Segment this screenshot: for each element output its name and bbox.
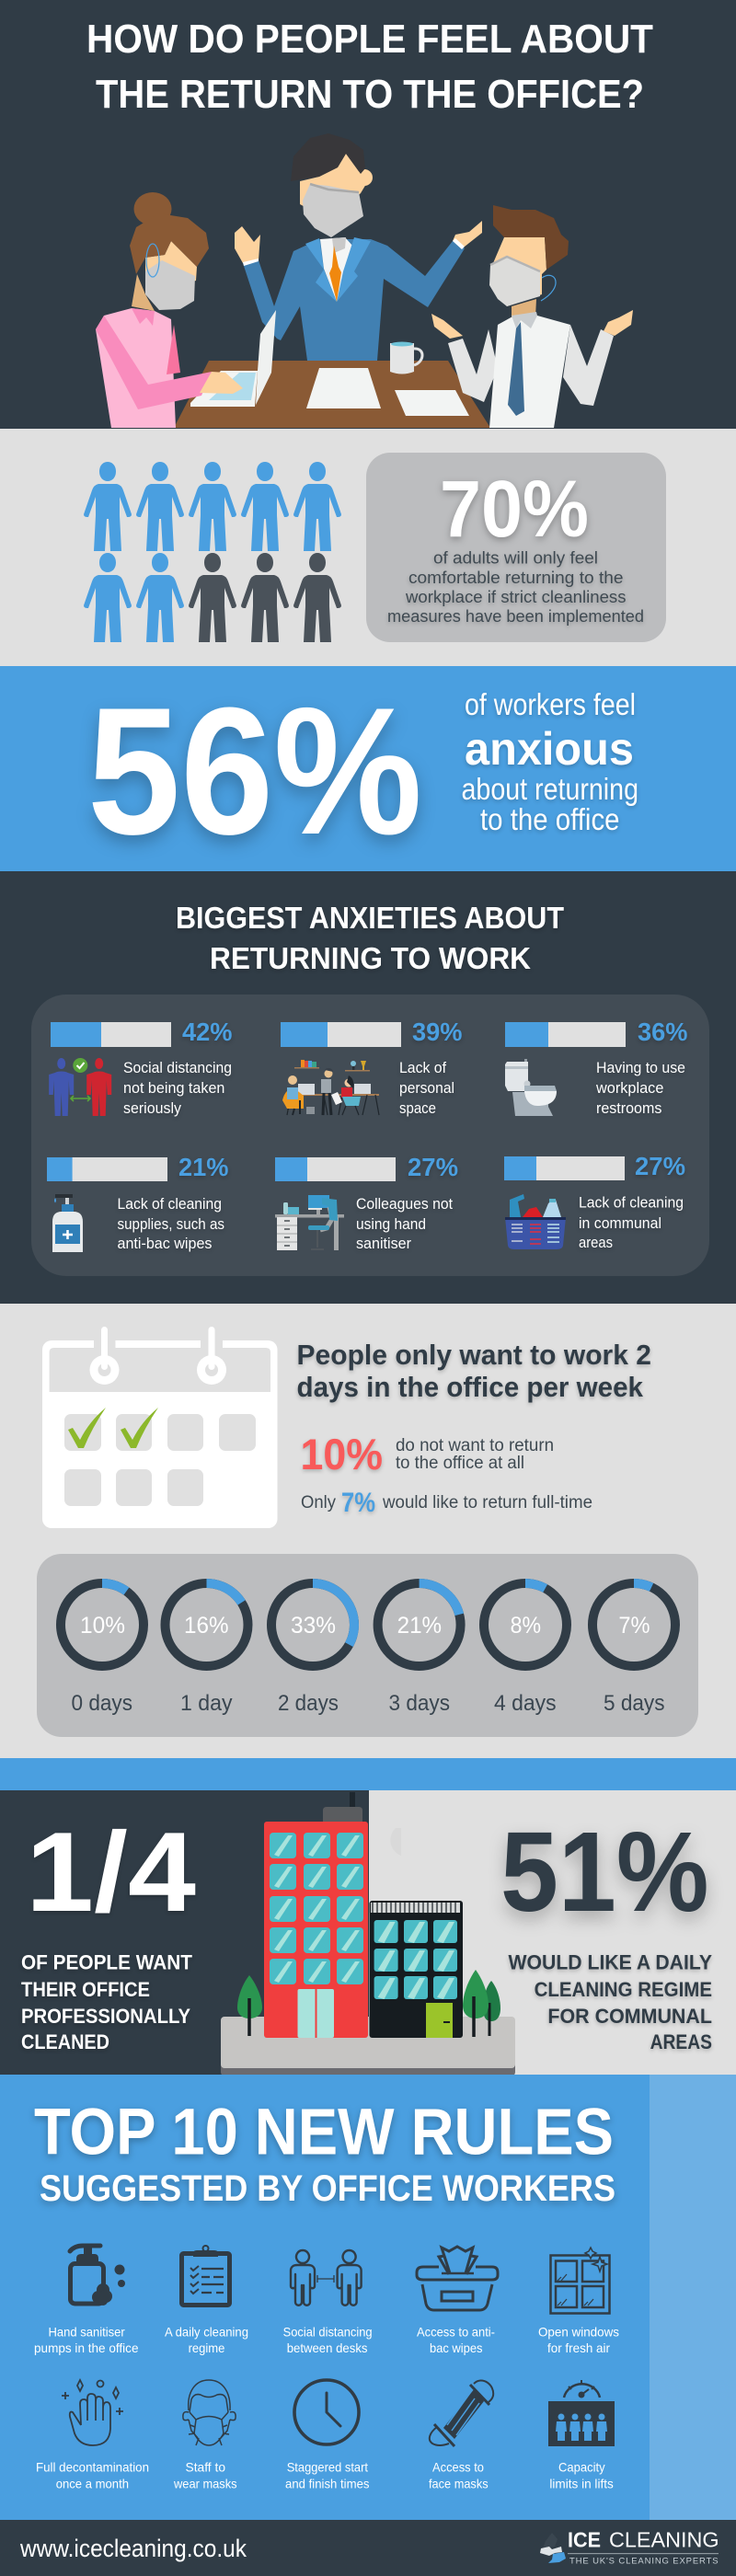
- icon: sanitiser bottle: [52, 1194, 83, 1252]
- stat: 10 percent: [300, 1430, 554, 1478]
- rule: anti-bac wipes: Access to anti-: [417, 2324, 495, 2339]
- logo: THE UK'S CLEANING EXPERTS: [569, 2557, 719, 2567]
- rule: social distancing: between desks: [287, 2340, 368, 2355]
- trees: [237, 1970, 500, 2037]
- stat description: of workers feel: [465, 687, 636, 721]
- rule: wear masks: [173, 2380, 237, 2490]
- icon: desk with chair: [275, 1195, 344, 1250]
- red building: [264, 1792, 368, 2038]
- text: daily cleaning regime: AREAS: [650, 2030, 712, 2053]
- stat: 7 percent: [301, 1488, 592, 1518]
- laptop: [190, 310, 276, 407]
- icon: toilet: [505, 1059, 557, 1116]
- logo: CLEANING: [609, 2528, 719, 2552]
- illustration: three masked office workers at a table: [96, 133, 633, 428]
- stat: 7 percent: 7%: [341, 1488, 375, 1518]
- rule: wear masks: Staff to: [186, 2460, 225, 2475]
- item: hand sanitiser use 27%: sanitiser: [356, 1236, 411, 1252]
- stat: 7 percent: Only: [301, 1493, 336, 1512]
- rule: staggered times: [285, 2380, 370, 2490]
- donut: 1 day: 1 day: [180, 1691, 232, 1716]
- donut: 2 days: 33%: [291, 1613, 336, 1639]
- icon: basket of cleaning products: [505, 1194, 566, 1249]
- heading: RETURNING TO WORK: [210, 941, 531, 975]
- donut: 4 days: 4 days: [494, 1691, 557, 1716]
- rule: sanitiser pumps: [34, 2246, 139, 2355]
- stat: one quarter: 1/4: [26, 1810, 196, 1936]
- item: cleaning supplies 21%: 21%: [178, 1153, 229, 1181]
- icon: two people with gap: [291, 2250, 362, 2306]
- black building: [370, 1901, 463, 2038]
- item: restrooms 36%: [505, 1018, 688, 1117]
- heading: TOP 10 NEW RULES: [34, 2097, 614, 2169]
- rule: full decontamination: once a month: [56, 2476, 129, 2490]
- icon: two people apart: [49, 1058, 111, 1116]
- item: personal space 39%: [281, 1018, 463, 1117]
- donut: 5 days: [592, 1583, 675, 1716]
- item: social distancing 42%: Social distancing: [123, 1060, 232, 1076]
- man in blue suit: [235, 133, 482, 361]
- donut: 4 days: 8%: [511, 1613, 541, 1639]
- heading: days in the office per week: [296, 1371, 644, 1403]
- item: hand sanitiser use 27%: [275, 1153, 458, 1252]
- rule: open windows: Open windows: [538, 2324, 619, 2339]
- donut: 4 days: [484, 1583, 567, 1716]
- item: communal areas 27%: 27%: [635, 1152, 685, 1180]
- panel: 70 percent stat: [0, 429, 736, 666]
- item: social distancing 42%: seriously: [123, 1100, 182, 1117]
- stat description: [387, 548, 644, 626]
- item: cleaning supplies 21%: anti-bac wipes: [118, 1236, 212, 1252]
- text: want professional cleaning: THEIR OFFICE: [21, 1978, 150, 2001]
- donut chart row: [37, 1554, 698, 1737]
- callout box: [366, 453, 666, 642]
- heading: [296, 1339, 651, 1403]
- stat: 10 percent: to the office at all: [396, 1454, 524, 1473]
- big number: 56%: [87, 670, 422, 872]
- item: social distancing 42%: [49, 1018, 233, 1117]
- woman in pink shirt: [96, 192, 243, 428]
- rule: wear masks: wear masks: [173, 2476, 237, 2490]
- illustration: office buildings: [221, 1792, 515, 2076]
- donut: 2 days: 2 days: [278, 1691, 339, 1716]
- rule: lift capacity: [548, 2380, 615, 2490]
- background: hero panel: [0, 0, 736, 429]
- rule: staggered times: and finish times: [285, 2476, 370, 2490]
- donut: 0 days: 10%: [80, 1613, 125, 1639]
- donut: 0 days: [61, 1583, 144, 1716]
- heading: People only want to work 2: [296, 1339, 651, 1371]
- heading: BIGGEST ANXIETIES ABOUT: [176, 901, 564, 935]
- item: hand sanitiser use 27%: 27%: [408, 1153, 458, 1181]
- item: communal areas 27%: in communal: [579, 1215, 661, 1232]
- text: want professional cleaning: [21, 1951, 193, 2053]
- table with papers and mug: [174, 342, 490, 428]
- icon: clipboard checklist: [182, 2246, 230, 2306]
- donut: 5 days: 7%: [618, 1613, 650, 1639]
- item: personal space 39%: space: [399, 1100, 436, 1117]
- item: communal areas 27%: Lack of cleaning: [579, 1195, 684, 1212]
- rule: lift capacity: limits in lifts: [549, 2476, 614, 2490]
- text: want professional cleaning: OF PEOPLE WANT: [21, 1951, 193, 1974]
- stat description: of adults will only feel: [433, 548, 598, 567]
- item: communal areas 27%: areas: [579, 1235, 613, 1251]
- inner card: [31, 995, 709, 1276]
- item: social distancing 42%: 42%: [182, 1018, 233, 1046]
- icon: face with mask: [183, 2380, 236, 2445]
- panel: office cleaning stats: [0, 1790, 736, 2076]
- stat description: about returning: [462, 772, 638, 806]
- icon: lift with gauge and people: [548, 2380, 615, 2446]
- item: hand sanitiser use 27%: using hand: [356, 1216, 426, 1233]
- donut: 2 days: [271, 1583, 354, 1716]
- rule: daily regime: [165, 2246, 248, 2355]
- title: THE RETURN TO THE OFFICE?: [96, 72, 644, 117]
- icon: crowded office: [282, 1060, 379, 1115]
- title: HOW DO PEOPLE FEEL ABOUT: [86, 17, 653, 62]
- stat description: [462, 687, 638, 836]
- icon: clock: [294, 2380, 359, 2444]
- donut: 1 day: [166, 1583, 248, 1716]
- panel: days in the office: [0, 1304, 736, 1758]
- text: daily cleaning regime: FOR COMMUNAL: [547, 2005, 712, 2028]
- heading: SUGGESTED BY OFFICE WORKERS: [40, 2168, 615, 2209]
- stat description: to the office: [480, 802, 620, 836]
- item: cleaning supplies 21%: supplies, such as: [118, 1216, 224, 1233]
- title: [86, 17, 653, 117]
- icon: calendar with two ticks: [42, 1327, 278, 1528]
- icon: pump bottle: [70, 2246, 125, 2306]
- donut: 3 days: [378, 1583, 461, 1716]
- donut: 0 days: 0 days: [72, 1691, 132, 1716]
- pictogram: 10 people, 7 highlighted: [84, 462, 341, 642]
- item: social distancing 42%: not being taken: [123, 1080, 224, 1097]
- text: daily cleaning regime: CLEANING REGIME: [535, 1978, 712, 2001]
- stat description: measures have been implemented: [387, 606, 644, 626]
- item: restrooms 36%: Having to use: [596, 1060, 685, 1076]
- icon: surgical mask: [430, 2381, 493, 2446]
- rule: daily regime: regime: [189, 2340, 225, 2355]
- rule: anti-bac wipes: [417, 2247, 498, 2355]
- donut: 1 day: 16%: [184, 1613, 228, 1639]
- item: personal space 39%: personal: [399, 1080, 454, 1097]
- item: cleaning supplies 21%: Lack of cleaning: [118, 1196, 222, 1213]
- panel: biggest anxieties: [0, 871, 736, 1304]
- rule: full decontamination: [36, 2380, 149, 2490]
- rule: face masks: [429, 2381, 493, 2490]
- rule: sanitiser pumps: pumps in the office: [34, 2340, 139, 2355]
- panel: 56 percent stat: [0, 666, 736, 872]
- stat description: anxious: [465, 723, 634, 775]
- heading: [176, 901, 564, 975]
- stat: 10 percent: do not want to return: [396, 1436, 554, 1455]
- heading: [34, 2097, 615, 2209]
- footer: [0, 2520, 736, 2576]
- website address: www.icecleaning.co.uk: [19, 2535, 247, 2562]
- text: want professional cleaning: PROFESSIONALLY: [21, 2005, 190, 2028]
- rule: social distancing: [283, 2250, 373, 2355]
- item: hand sanitiser use 27%: Colleagues not: [356, 1196, 453, 1213]
- logo mark: UK map: [540, 2533, 566, 2563]
- big number: 70%: [440, 465, 589, 554]
- item: restrooms 36%: 36%: [638, 1018, 688, 1046]
- text: daily cleaning regime: [508, 1951, 712, 2053]
- text: daily cleaning regime: WOULD LIKE A DAILY: [508, 1951, 712, 1974]
- item: communal areas 27%: [504, 1152, 685, 1251]
- donut: 3 days: 21%: [397, 1613, 442, 1639]
- rule: full decontamination: Full decontamination: [36, 2460, 149, 2475]
- panel: top 10 new rules: [0, 2075, 736, 2520]
- item: restrooms 36%: restrooms: [596, 1100, 661, 1117]
- rule: open windows: for fresh air: [547, 2340, 610, 2355]
- item: personal space 39%: 39%: [412, 1018, 463, 1046]
- rule: face masks: Access to: [432, 2460, 484, 2475]
- donut: 5 days: 5 days: [604, 1691, 664, 1716]
- rule: anti-bac wipes: bac wipes: [430, 2340, 482, 2355]
- stat description: workplace if strict cleanliness: [405, 587, 626, 606]
- rule: social distancing: Social distancing: [283, 2324, 373, 2339]
- stat: 51 percent: 51%: [500, 1810, 708, 1936]
- icon: sparkling window: [550, 2248, 609, 2313]
- logo: ICE: [568, 2528, 601, 2552]
- item: cleaning supplies 21%: [47, 1153, 229, 1252]
- stat: 7 percent: would like to return full-time: [382, 1493, 592, 1512]
- item: restrooms 36%: workplace: [595, 1080, 663, 1097]
- icon: wipes tub: [417, 2247, 498, 2310]
- rule: sanitiser pumps: Hand sanitiser: [48, 2324, 125, 2339]
- divider band: [0, 1758, 736, 1790]
- donut: 3 days: 3 days: [388, 1691, 450, 1716]
- item: personal space 39%: Lack of: [399, 1060, 446, 1076]
- logo: [540, 2528, 719, 2567]
- stat description: comfortable returning to the: [408, 568, 624, 587]
- rule: open windows: [538, 2248, 619, 2355]
- rule: face masks: face masks: [429, 2476, 489, 2490]
- man in white shirt: [431, 205, 633, 428]
- text: want professional cleaning: CLEANED: [21, 2030, 109, 2053]
- rule: staggered times: Staggered start: [287, 2460, 368, 2475]
- rule: daily regime: A daily cleaning: [165, 2324, 248, 2339]
- icon: clean hand: [62, 2380, 123, 2445]
- stat: 10 percent: 10%: [300, 1430, 383, 1478]
- rule: lift capacity: Capacity: [558, 2460, 605, 2475]
